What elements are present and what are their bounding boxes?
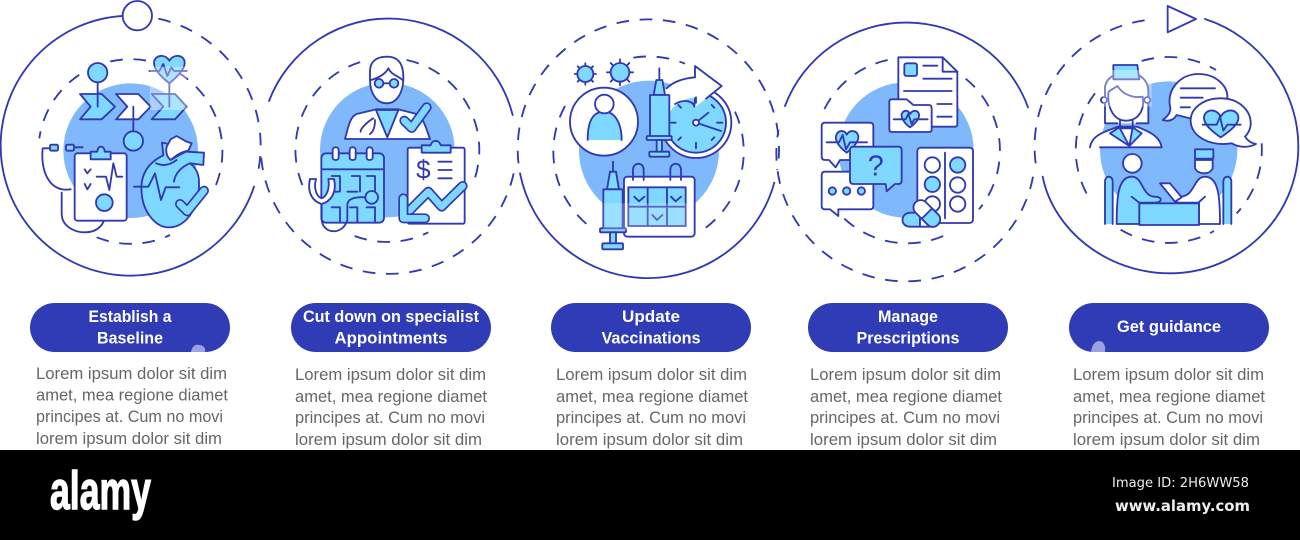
body text: [36, 364, 228, 448]
icon: folder with heart: [889, 99, 932, 132]
body text: principes at. Cum no movi: [810, 408, 1000, 427]
icon: speech bubble question: ?: [868, 150, 884, 182]
pill heading: manage prescriptions: Prescriptions: [856, 330, 960, 348]
icon: speech bubble dots: [822, 172, 873, 216]
body text: lorem ipsum dolor sit dim: [556, 430, 743, 449]
body text: lorem ipsum dolor sit dim: [36, 429, 222, 448]
body text: principes at. Cum no movi: [36, 407, 223, 426]
body text: Lorem ipsum dolor sit dim: [810, 365, 1001, 384]
body text: lorem ipsum dolor sit dim: [810, 430, 997, 449]
pill heading: update vaccinations: Update: [622, 308, 680, 326]
inner dashed ring: [39, 59, 222, 244]
icon: speech bubble heart: [1191, 98, 1256, 147]
icon: doctor at desk: [1160, 149, 1231, 224]
stock logo: alamy: [50, 461, 151, 521]
pill heading: manage prescriptions: Manage: [878, 308, 938, 326]
icon: doctor with check: [345, 57, 430, 139]
outer ring with knob: [1, 1, 261, 276]
icon: calendar with checks: [624, 164, 695, 237]
body text: principes at. Cum no movi: [1073, 408, 1263, 427]
body text: Lorem ipsum dolor sit dim: [556, 365, 747, 384]
body text: [295, 365, 487, 449]
icon: speech bubble text: [1163, 74, 1227, 121]
body text: amet, mea regione diamet: [295, 387, 487, 406]
illustration: prescriptions: [776, 23, 1033, 281]
blue backdrop circle: [320, 83, 455, 217]
pill heading: get guidance: [1069, 303, 1269, 352]
pill heading: update vaccinations: Vaccinations: [602, 330, 700, 348]
body text: amet, mea regione diamet: [36, 386, 228, 404]
illustration: doctor, calendar, finances: [261, 19, 514, 274]
outer ring with play marker: [1035, 6, 1298, 273]
pill heading: update vaccinations: [551, 303, 751, 352]
icon: clock with arrow: [661, 66, 731, 158]
illustration: consultation: [1035, 6, 1298, 273]
body text: principes at. Cum no movi: [295, 408, 485, 427]
icon: calendar with stethoscope: [309, 147, 384, 231]
panel: cut down on specialist appointments: [261, 19, 514, 449]
inner dashed ring: [821, 60, 1000, 243]
icon: financial clipboard: $: [416, 155, 431, 185]
pill heading: get guidance: Get guidance: [1117, 318, 1221, 336]
panel: manage prescriptions: [776, 23, 1033, 449]
body text: Lorem ipsum dolor sit dim: [295, 365, 486, 384]
icon: pill blister pack: [917, 148, 973, 223]
icon: patient at desk: [1105, 154, 1161, 224]
body text: principes at. Cum no movi: [556, 408, 746, 427]
panel: get guidance: [1035, 6, 1298, 449]
illustration: vaccination schedule: [518, 19, 779, 278]
icon: speech bubble question: [850, 147, 902, 191]
watermark haze: [603, 203, 687, 230]
panel: update vaccinations: [518, 19, 779, 449]
icon: stethoscope and clipboard: [42, 145, 127, 232]
blue backdrop circle: [579, 81, 719, 221]
body text: lorem ipsum dolor sit dim: [1073, 430, 1260, 449]
outer ring: [261, 19, 514, 274]
body text: amet, mea regione diamet: [810, 387, 1002, 406]
pill heading: manage prescriptions: [808, 303, 1008, 352]
icon: nurse: [1090, 65, 1162, 147]
pill heading: establish a baseline: Baseline: [97, 330, 163, 348]
website: www.alamy.com: [1115, 497, 1250, 515]
body text: amet, mea regione diamet: [1073, 387, 1265, 406]
body text: [810, 365, 1002, 449]
icon: process chevrons: [80, 56, 187, 151]
icon: viruses: [575, 59, 633, 85]
inner dashed ring: [553, 56, 744, 231]
pill heading: cut down on specialist appointments: [291, 303, 491, 352]
inner dashed ring: [295, 60, 479, 242]
image id: Image ID: 2H6WW58: [1112, 475, 1249, 491]
icon: capsules: [902, 197, 943, 230]
body text: lorem ipsum dolor sit dim: [295, 430, 482, 449]
icon: medical document: [898, 57, 957, 127]
footer bar: [0, 450, 1300, 540]
icon: heart with check: [134, 136, 204, 227]
pill heading: establish a baseline: [30, 303, 230, 352]
body text: amet, mea regione diamet: [556, 387, 748, 406]
pill heading: cut down on specialist appointments: Cut down on specialist: [303, 308, 479, 326]
outer ring: [518, 19, 779, 278]
icon: syringe lower: [600, 162, 626, 249]
pill heading: establish a baseline: Establish a: [88, 308, 172, 326]
body text: Lorem ipsum dolor sit dim: [36, 364, 227, 383]
body text: [1073, 365, 1265, 449]
icon: syringe upper: [647, 68, 672, 157]
inner dashed ring: [1076, 57, 1262, 243]
blue backdrop circle: [63, 83, 198, 218]
blue backdrop circle: [1100, 81, 1237, 219]
icon: financial clipboard: [403, 141, 465, 224]
icon: person in circle: [570, 88, 638, 156]
icon: desk: [1139, 203, 1199, 225]
body text: [556, 365, 748, 449]
pill heading: cut down on specialist appointments: Appointments: [334, 330, 448, 348]
outer ring: [776, 23, 1033, 281]
illustration: baseline health: [1, 1, 261, 276]
panel: establish a baseline: [1, 1, 261, 448]
blue backdrop circle: [838, 82, 974, 218]
body text: Lorem ipsum dolor sit dim: [1073, 365, 1264, 384]
icon: speech bubble heart: [822, 123, 873, 167]
